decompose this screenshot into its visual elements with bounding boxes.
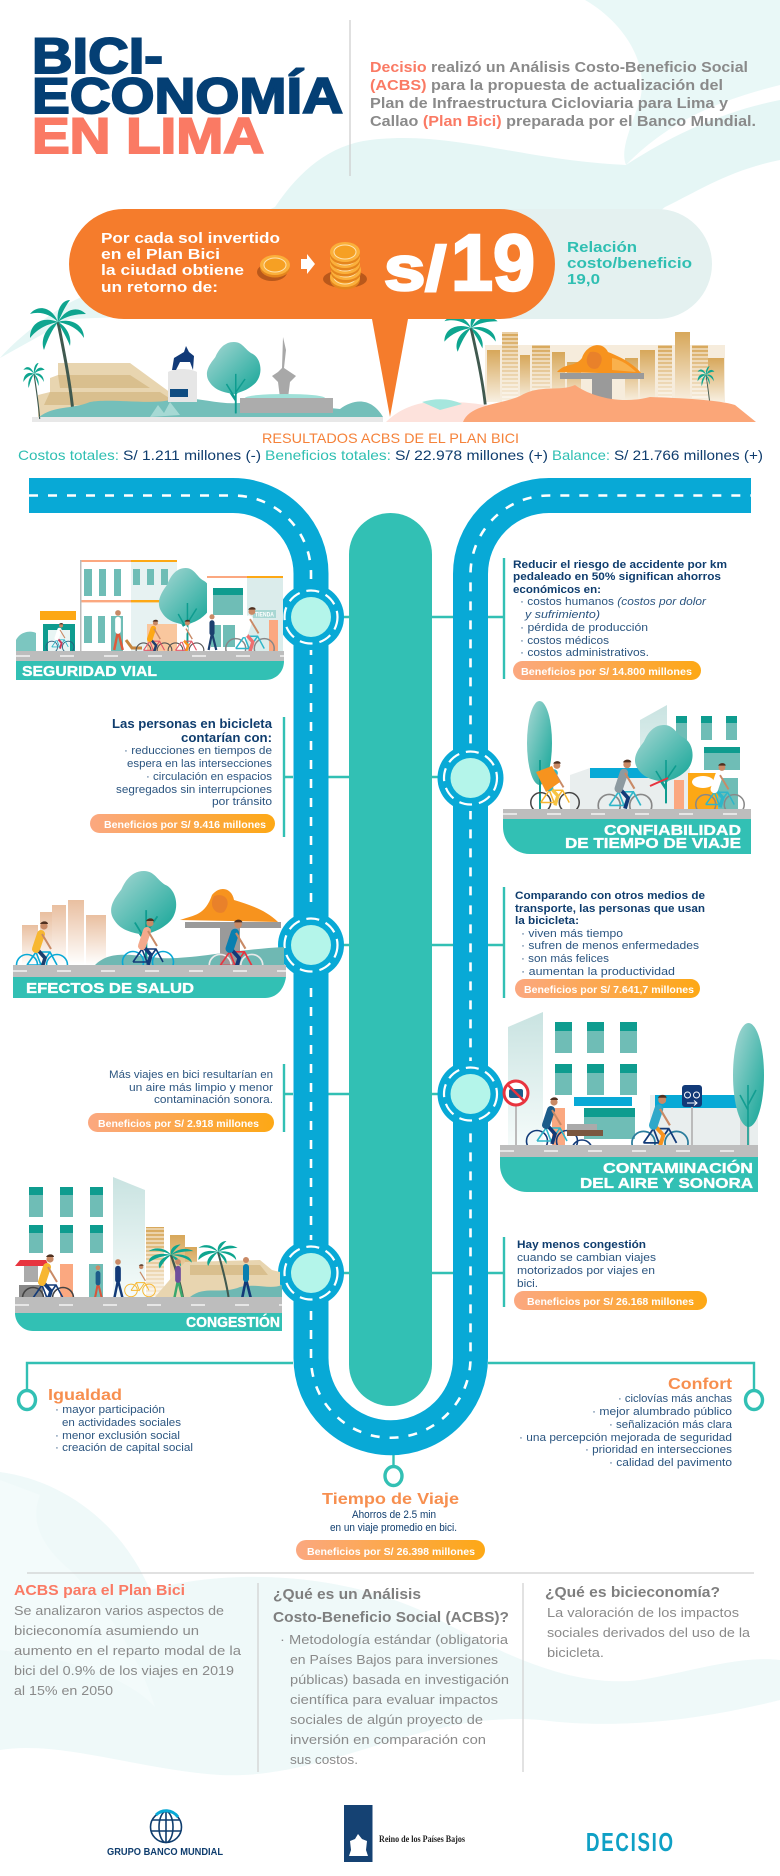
text: accident risk: · costos humanos (costos por dolor xyxy=(520,596,707,608)
text: people on bicycles: segregados sin interrupciones xyxy=(116,784,273,796)
benefit pill: Beneficios por S/ 26.398 millones xyxy=(307,1546,475,1558)
text: accident risk: · costos administrativos. xyxy=(520,647,649,659)
results line: S/ 21.766 millones (+) xyxy=(614,447,763,463)
text block: que es bicieconomia: La valoración de los impactos xyxy=(547,1605,740,1620)
text: people on bicycles: · circulación en espacios xyxy=(146,771,273,783)
benefit pill: Beneficios por S/ 2.918 millones xyxy=(98,1118,259,1130)
road xyxy=(29,496,751,1438)
icon: arrow xyxy=(301,254,315,274)
text block: ACBS para el Plan Bici: ACBS para el Plan Bici xyxy=(14,1582,185,1599)
logo: Reino de los Paises Bajos: Reino de los Países Bajos xyxy=(379,1834,465,1844)
text: confort: · ciclovías más anchas xyxy=(618,1393,733,1405)
results line: S/ 1.211 millones (-) xyxy=(123,447,261,463)
text block: que es ACBS: sociales de algún proyecto de xyxy=(290,1712,483,1727)
text block: que es ACBS: públicas) basada en investigación xyxy=(290,1672,509,1687)
illustration: right Lima skyline xyxy=(386,309,756,422)
roundabout 1 xyxy=(278,584,344,650)
text: confort xyxy=(519,1376,733,1469)
results line xyxy=(18,447,763,463)
illustration: street scene xyxy=(15,1177,282,1308)
text: accident risk: · pérdida de producción xyxy=(520,622,648,634)
text: less congestion xyxy=(514,1239,707,1310)
text: igualdad: · menor exclusión social xyxy=(55,1430,180,1442)
text: cleaner air: un aire más limpio y menor xyxy=(129,1082,273,1094)
roundabout 5 xyxy=(278,1240,344,1306)
panel: congestion xyxy=(15,1177,282,1331)
panel: main orange callout: un retorno de: xyxy=(101,280,218,296)
text block: que es ACBS: en Países Bajos para inversiones xyxy=(290,1652,499,1667)
text block: ACBS para el Plan Bici: bicieconomía asumiendo un xyxy=(14,1623,199,1638)
text: less congestion: cuando se cambian viajes xyxy=(517,1252,657,1264)
icon: single coin xyxy=(257,255,290,281)
text: people on bicycles: por tránsito xyxy=(212,796,272,808)
text block: que es ACBS: científica para evaluar impactos xyxy=(290,1692,499,1707)
text: igualdad: · creación de capital social xyxy=(55,1442,193,1454)
text block: que es ACBS: sus costos. xyxy=(290,1752,358,1767)
text block: ACBS para el Plan Bici xyxy=(14,1582,242,1698)
text: igualdad: Igualdad xyxy=(48,1387,122,1404)
text: comparison with other modes: transporte, las personas que usan xyxy=(515,903,705,915)
big figure xyxy=(384,218,535,307)
text: igualdad: en actividades sociales xyxy=(62,1417,182,1429)
results line: Costos totales: xyxy=(18,447,119,463)
text: people on bicycles: · reducciones en tiempos de xyxy=(124,745,272,757)
text block: que es ACBS: · Metodología estándar (obligatoria xyxy=(280,1632,509,1647)
text block: que es bicieconomia xyxy=(545,1584,751,1660)
text block: ACBS para el Plan Bici: al 15% en 2050 xyxy=(14,1683,113,1698)
text: confort: Confort xyxy=(668,1376,733,1393)
illustration: street scene xyxy=(504,1012,764,1160)
text: comparison with other modes: la bicicleta: xyxy=(515,915,579,927)
text: comparison with other modes: · son más felices xyxy=(521,953,610,965)
panel: confiabilidad de tiempo de viaje: DE TIEMPO DE VIAJE xyxy=(565,835,741,852)
illustration: park scene xyxy=(16,871,284,976)
panel: contaminacion del aire y sonora: DEL AIRE Y SONORA xyxy=(580,1175,753,1192)
intro paragraph: Decisio realizó un Análisis Costo-Beneficio Social xyxy=(370,60,748,76)
text block: que es ACBS: ¿Qué es un Análisis xyxy=(273,1586,421,1603)
logo: Reino de los Paises Bajos xyxy=(344,1805,465,1862)
panel: cost/benefit ratio pill xyxy=(400,209,712,319)
benefit pill: Beneficios por S/ 26.168 millones xyxy=(527,1296,694,1308)
text: accident risk: y sufrimiento) xyxy=(524,609,600,621)
text block: ACBS para el Plan Bici: bici del 0.9% de los viajes en 2019 xyxy=(14,1663,234,1678)
panel: main orange callout: Por cada sol invertido xyxy=(101,231,280,247)
text: accident risk: · costos médicos xyxy=(520,635,610,647)
text: comparison with other modes: · aumentan la productividad xyxy=(521,966,675,978)
text block: que es bicieconomia: ¿Qué es bicieconomía? xyxy=(545,1584,720,1601)
logo: Grupo Banco Mundial xyxy=(107,1811,224,1858)
text block: que es ACBS: inversión en comparación con xyxy=(290,1732,486,1747)
text: accident risk xyxy=(513,559,727,680)
text block: que es bicieconomia: bicicleta. xyxy=(547,1645,604,1660)
intro paragraph xyxy=(370,60,756,130)
text: less congestion: bici. xyxy=(517,1278,538,1290)
benefit pill xyxy=(514,1291,707,1310)
panel: main orange callout xyxy=(69,209,555,417)
roundabout 3 xyxy=(278,912,344,978)
benefit pill xyxy=(515,979,700,998)
text: confort: · prioridad en intersecciones xyxy=(585,1444,733,1456)
results line: S/ 22.978 millones (+) xyxy=(395,447,548,463)
text: people on bicycles: espera en las intersecciones xyxy=(127,758,273,770)
roundabout 2 xyxy=(438,745,504,811)
text: comparison with other modes: · sufren de menos enfermedades xyxy=(521,940,700,952)
text block: que es bicieconomia: sociales derivados del uso de la xyxy=(547,1625,751,1640)
big figure: s/ xyxy=(384,235,446,304)
title: EN LIMA xyxy=(32,108,264,164)
benefit pill xyxy=(88,1113,274,1132)
panel: contaminacion del aire y sonora xyxy=(500,1012,764,1192)
title xyxy=(32,28,343,164)
benefit pill: Beneficios por S/ 14.800 millones xyxy=(521,666,692,678)
benefit pill xyxy=(513,661,701,680)
panel: confiabilidad de tiempo de viaje xyxy=(503,701,751,854)
text: accident risk: pedaleado en 50% significan ahorros xyxy=(513,571,721,583)
header divider xyxy=(349,20,351,176)
panel: main orange callout: la ciudad obtiene xyxy=(101,263,244,279)
central green median xyxy=(349,513,432,1406)
benefit pill xyxy=(90,814,275,833)
text: people on bicycles xyxy=(90,716,275,833)
text: cleaner air: Más viajes en bici resultarían en xyxy=(109,1069,273,1081)
text: accident risk: económicos en: xyxy=(513,584,601,596)
text: igualdad xyxy=(48,1387,193,1454)
icon: bike lane sign xyxy=(682,1085,702,1145)
big figure: 19 xyxy=(451,218,535,307)
logo: Decisio: DECISIO xyxy=(586,1827,673,1857)
illustration: street scene xyxy=(16,560,283,659)
text block: ACBS para el Plan Bici: Se analizaron varios aspectos de xyxy=(14,1603,224,1618)
results line: Balance: xyxy=(552,447,610,463)
text block: ACBS para el Plan Bici: aumento en el reparto modal de la xyxy=(14,1643,242,1658)
panel: efectos de salud xyxy=(13,871,286,998)
text: cleaner air xyxy=(88,1069,274,1132)
text: tiempo de viaje: en un viaje promedio en bici. xyxy=(330,1522,457,1534)
panel: main orange callout: en el Plan Bici xyxy=(101,247,220,263)
benefit pill: Beneficios por S/ 9.416 millones xyxy=(104,819,266,831)
results heading: RESULTADOS ACBS DE EL PLAN BICI xyxy=(262,430,519,446)
text: confort: · mejor alumbrado público xyxy=(592,1406,732,1418)
panel: cost/benefit ratio pill: 19,0 xyxy=(567,271,600,288)
text: comparison with other modes xyxy=(515,890,705,998)
text: tiempo de viaje xyxy=(296,1491,485,1560)
icon: no cars sign xyxy=(504,1081,528,1145)
panel: cost/benefit ratio pill: costo/beneficio xyxy=(567,255,692,272)
panel: seguridad vial: SEGURIDAD VIAL xyxy=(22,663,157,680)
text: people on bicycles: contarían con: xyxy=(181,730,272,745)
text: confort: · calidad del pavimento xyxy=(609,1457,732,1469)
text: confort: · una percepción mejorada de seguridad xyxy=(519,1432,732,1444)
shop sign: TIENDA xyxy=(255,612,275,618)
panel: contaminacion del aire y sonora: CONTAMINACIÓN xyxy=(603,1159,753,1177)
text: tiempo de viaje: Tiempo de Viaje xyxy=(322,1491,459,1508)
text: tiempo de viaje: Ahorros de 2.5 min xyxy=(352,1509,436,1521)
footer separators xyxy=(27,1573,754,1772)
text: less congestion: motorizados por viajes en xyxy=(517,1265,655,1277)
logo: Grupo Banco Mundial: GRUPO BANCO MUNDIAL xyxy=(107,1846,224,1858)
panel: cost/benefit ratio pill: Relación xyxy=(567,239,637,256)
panel: confiabilidad de tiempo de viaje: CONFIABILIDAD xyxy=(604,822,741,839)
intro paragraph: (ACBS) para la propuesta de actualización del xyxy=(370,78,723,94)
results line: Beneficios totales: xyxy=(265,447,391,463)
roundabout 4 xyxy=(438,1061,504,1127)
panel: efectos de salud: EFECTOS DE SALUD xyxy=(26,980,194,997)
text: igualdad: · mayor participación xyxy=(55,1404,165,1416)
title: ECONOMÍA xyxy=(32,68,343,124)
shop sign xyxy=(253,610,276,618)
intro paragraph: Callao (Plan Bici) preparada por el Banco Mundial. xyxy=(370,114,756,130)
text: less congestion: Hay menos congestión xyxy=(517,1239,646,1251)
illustration: left Lima skyline xyxy=(23,300,383,422)
connector lines xyxy=(27,558,754,1466)
benefit pill: Beneficios por S/ 7.641,7 millones xyxy=(524,984,694,996)
intro paragraph: Plan de Infraestructura Cicloviaria para Lima y xyxy=(370,96,728,112)
text: accident risk: Reducir el riesgo de accidente por km xyxy=(513,559,727,571)
text block: que es ACBS xyxy=(273,1586,509,1767)
text: confort: · señalización más clara xyxy=(609,1419,733,1431)
text: cleaner air: contaminación sonora. xyxy=(154,1094,273,1106)
panel: seguridad vial xyxy=(16,560,284,680)
text: comparison with other modes: · viven más tiempo xyxy=(521,928,623,940)
text: comparison with other modes: Comparando con otros medios de xyxy=(515,890,705,902)
text block: que es ACBS: Costo-Beneficio Social (ACBS)? xyxy=(273,1609,509,1626)
endpoint rings xyxy=(18,1390,762,1486)
icon: coin stack xyxy=(323,242,367,290)
illustration: street scene xyxy=(527,701,744,816)
title: BICI- xyxy=(32,28,163,84)
panel: congestion: CONGESTIÓN xyxy=(186,1313,280,1331)
text: people on bicycles: Las personas en bicicleta xyxy=(112,716,273,731)
benefit pill xyxy=(296,1540,485,1560)
